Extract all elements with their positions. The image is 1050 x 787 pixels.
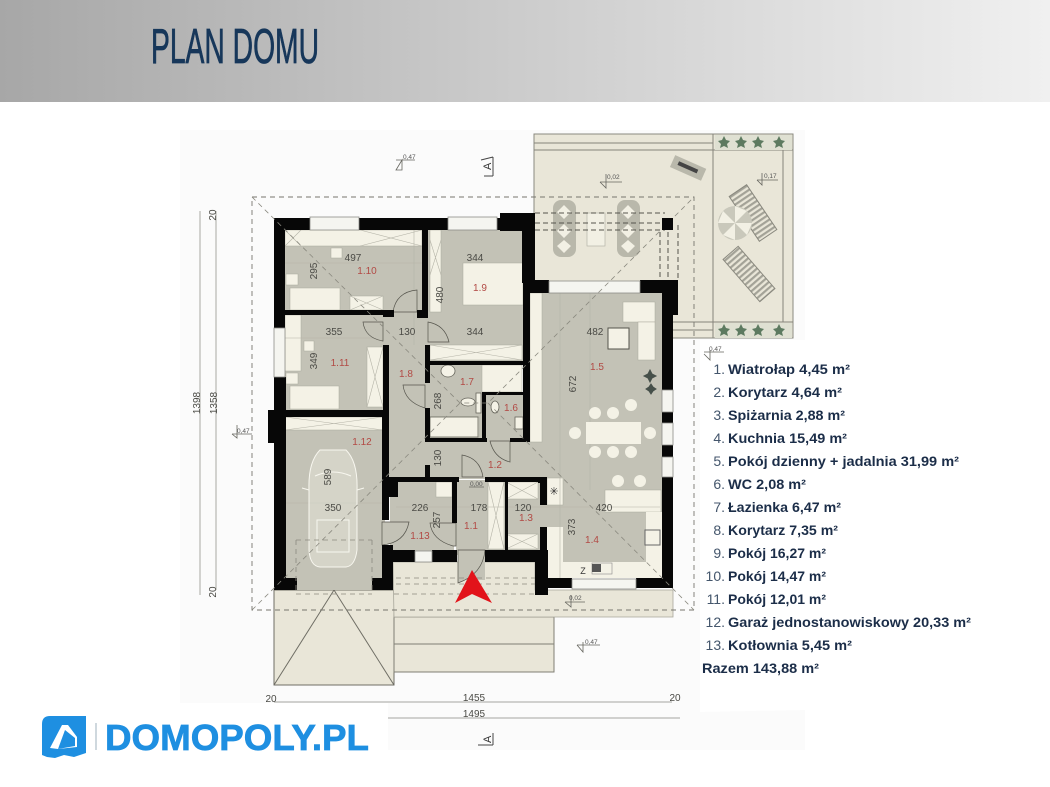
- logo icon: [42, 716, 86, 758]
- dimension labels: 373: [567, 518, 578, 535]
- room numbers: 1.1: [464, 521, 478, 532]
- dimension labels: 268: [433, 392, 444, 409]
- dimension labels: 355: [326, 327, 343, 338]
- room area list: 3.: [713, 407, 725, 423]
- room area list: 4.: [713, 430, 725, 446]
- room area list: Spiżarnia 2,88 m²: [728, 407, 845, 423]
- room numbers: 1.5: [590, 362, 604, 373]
- room floors: [285, 230, 663, 590]
- sofa, dining and kitchen furniture: Z: [580, 566, 586, 576]
- sofa, dining and kitchen furniture: ✳: [549, 486, 559, 498]
- room numbers: 1.9: [473, 283, 487, 294]
- room area list: [702, 361, 971, 676]
- dimension labels: 1455: [463, 693, 486, 704]
- room area list: Wiatrołap 4,45 m²: [728, 361, 850, 377]
- terrace post: [662, 218, 673, 230]
- dimension labels: [192, 209, 681, 720]
- dimension labels: 1358: [209, 391, 220, 414]
- dimension labels: 344: [467, 253, 484, 264]
- dimension labels: 257: [432, 511, 443, 528]
- room area list: 1.: [713, 361, 725, 377]
- terrace: [534, 134, 793, 338]
- room area list: 2.: [713, 384, 725, 400]
- room numbers: 1.10: [357, 266, 377, 277]
- roof outline dashes: [252, 197, 694, 610]
- room area list: 5.: [713, 453, 725, 469]
- level markers: 0,47: [237, 428, 250, 435]
- dimension labels: 295: [309, 262, 320, 279]
- dimension labels: 20: [265, 694, 277, 705]
- room area list: Razem 143,88 m²: [702, 660, 819, 676]
- room numbers: 1.4: [585, 535, 599, 546]
- plan background: [180, 130, 805, 750]
- room area list: Pokój 14,47 m²: [728, 568, 826, 584]
- room area list: Łazienka 6,47 m²: [728, 499, 841, 515]
- logo text: DOMOPOLY.PL: [105, 717, 369, 758]
- grill: [670, 155, 706, 181]
- section markers A: [478, 157, 494, 745]
- closets and cream fittings: [285, 230, 662, 578]
- room numbers: 1.7: [460, 377, 474, 388]
- room numbers: 1.12: [352, 437, 372, 448]
- level markers: 0,17: [764, 173, 777, 180]
- dimension lines: [200, 211, 680, 718]
- dimension labels: 482: [587, 327, 604, 338]
- dimension labels: 344: [467, 327, 484, 338]
- level markers: 0,02: [569, 595, 582, 602]
- room numbers: [331, 266, 604, 546]
- room area list: 10.: [706, 568, 725, 584]
- dimension labels: 20: [208, 209, 219, 221]
- room numbers: 1.2: [488, 460, 502, 471]
- sun loungers and umbrella: [718, 185, 777, 302]
- dimension labels: 130: [399, 327, 416, 338]
- room area list: Kotłownia 5,45 m²: [728, 637, 852, 653]
- room area list: 12.: [706, 614, 725, 630]
- terrace benches and table: [553, 200, 640, 257]
- room area list: Korytarz 7,35 m²: [728, 522, 838, 538]
- walls: [268, 213, 678, 595]
- title: PLAN DOMU: [151, 20, 319, 74]
- dimension labels: 349: [309, 352, 320, 369]
- room numbers: 1.6: [504, 403, 518, 414]
- dimension labels: 497: [345, 253, 362, 264]
- header band: [0, 0, 1050, 102]
- level markers: 0,47: [585, 639, 598, 646]
- dimension labels: 480: [435, 286, 446, 303]
- room area list: Korytarz 4,64 m²: [728, 384, 842, 400]
- car in garage: [302, 450, 364, 567]
- carport and porch roof: [274, 562, 673, 685]
- dimension labels: 420: [596, 503, 613, 514]
- level markers: 0,02: [607, 174, 620, 181]
- logo: [0, 703, 388, 787]
- dimension labels: 1398: [192, 391, 203, 414]
- level markers: [232, 154, 778, 652]
- level markers: 0,47: [709, 346, 722, 353]
- door swings: [363, 290, 510, 583]
- room numbers: 1.11: [331, 358, 350, 369]
- dimension labels: 120: [515, 503, 532, 514]
- room area list: 11.: [707, 591, 725, 607]
- terrace planters: [715, 135, 792, 338]
- section markers A: A: [482, 735, 494, 743]
- dimension labels: 1495: [463, 709, 486, 720]
- room area list: Pokój 16,27 m²: [728, 545, 826, 561]
- entrance arrow: [455, 570, 492, 603]
- level markers: 0,00: [470, 481, 483, 488]
- room area list: Pokój 12,01 m²: [728, 591, 826, 607]
- room area list: 7.: [713, 499, 725, 515]
- dimension labels: 350: [325, 503, 342, 514]
- room numbers: 1.13: [410, 531, 430, 542]
- sofa, dining and kitchen furniture: [549, 302, 660, 576]
- dimension labels: 178: [471, 503, 488, 514]
- windows: [274, 217, 673, 589]
- level markers: 0,47: [403, 154, 416, 161]
- room area list: Kuchnia 15,49 m²: [728, 430, 847, 446]
- dimension labels: 20: [208, 586, 219, 598]
- dimension labels: 226: [412, 503, 429, 514]
- dimension labels: 20: [669, 693, 681, 704]
- bathroom fixtures: [430, 365, 523, 437]
- room area list: Pokój dzienny + jadalnia 31,99 m²: [728, 453, 959, 469]
- dimension labels: 589: [323, 468, 334, 485]
- floor plan: [192, 134, 793, 745]
- room area list: 8.: [713, 522, 725, 538]
- room area list: WC 2,08 m²: [728, 476, 806, 492]
- room numbers: 1.3: [519, 513, 533, 524]
- dimension labels: 672: [568, 375, 579, 392]
- room area list: 6.: [713, 476, 725, 492]
- room area list: 9.: [713, 545, 725, 561]
- dimension labels: 130: [433, 449, 444, 466]
- room area list: 13.: [706, 637, 725, 653]
- section markers A: A: [482, 162, 494, 170]
- room numbers: 1.8: [399, 369, 413, 380]
- room area list: Garaż jednostanowiskowy 20,33 m²: [728, 614, 971, 630]
